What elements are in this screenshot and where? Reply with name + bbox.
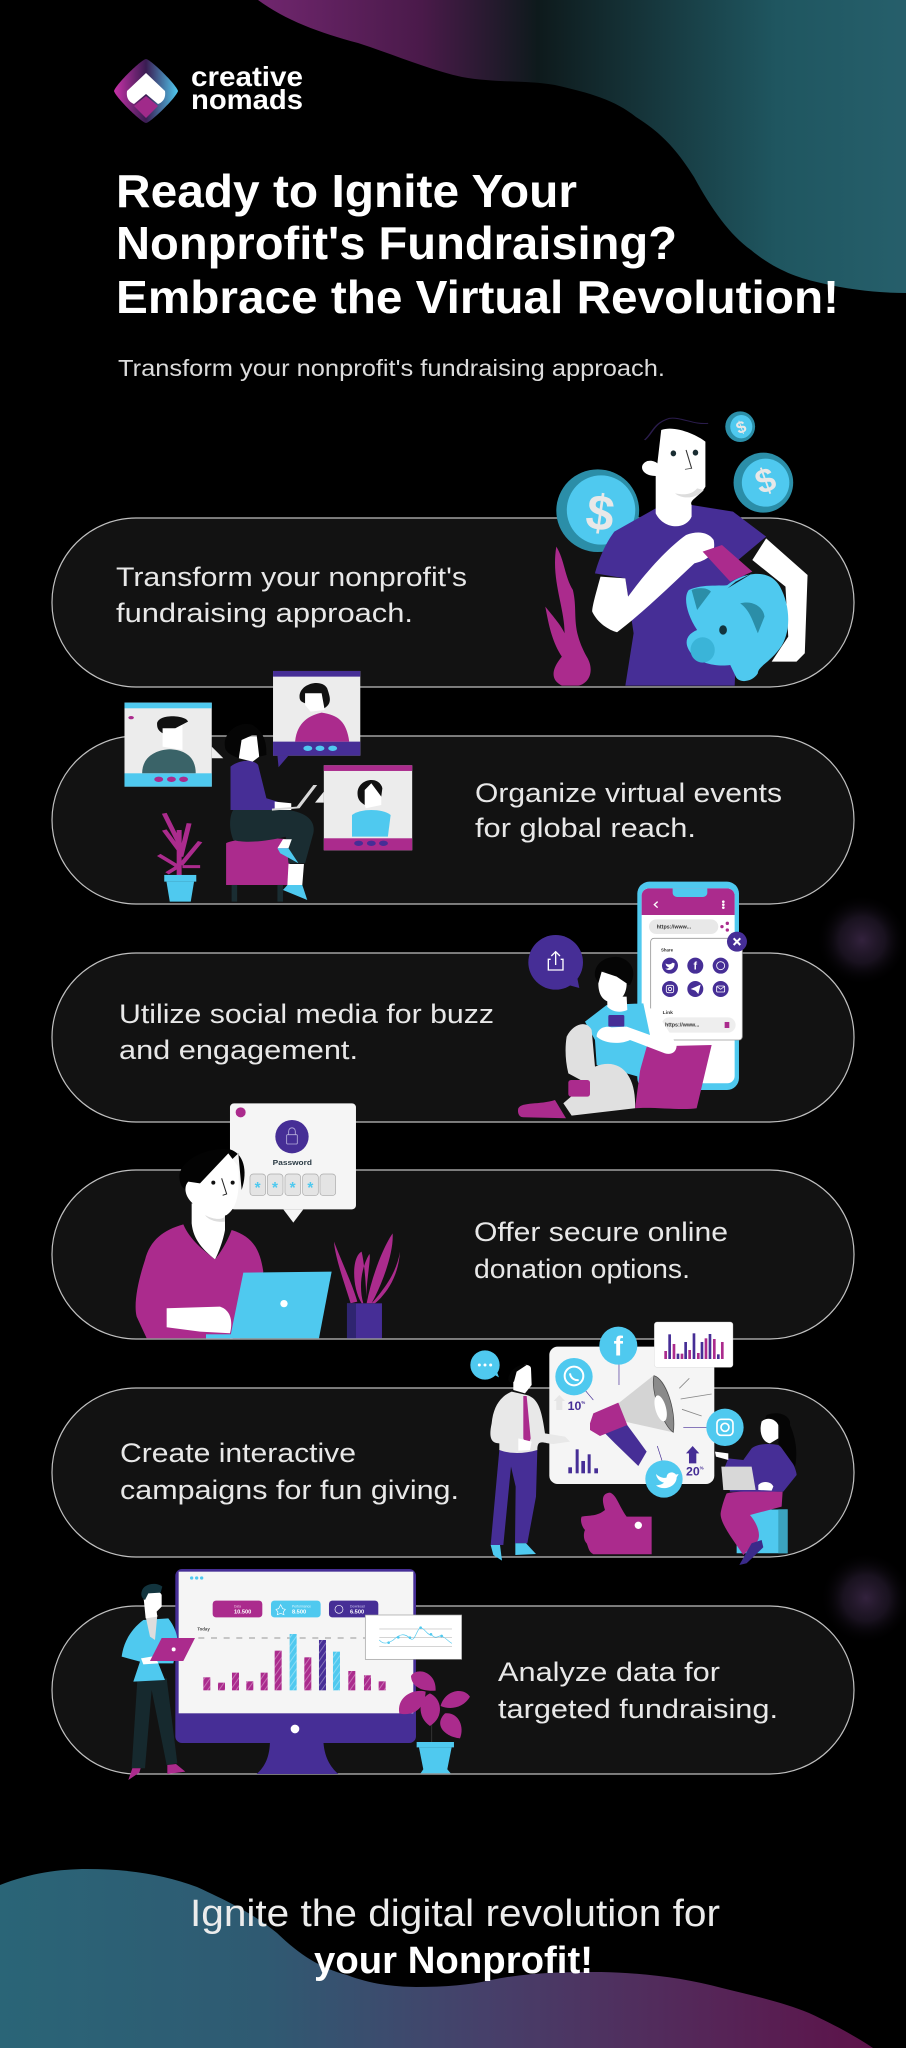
title: Ready to Ignite Your [116,165,577,217]
line chart card [365,1615,462,1659]
bar chart: Today [197,1626,210,1631]
password bubble: Password [273,1158,312,1167]
share popup: https://www... [665,1023,700,1029]
stat 20 percent [686,1446,704,1479]
plant in pot [399,1671,470,1773]
stat card: performance: Performance [292,1604,311,1608]
share popup: Share [661,947,674,952]
panel text: for global reach. [475,813,696,843]
panel: campaigns [52,1388,854,1557]
stat card: data: Data [234,1604,241,1608]
panel text [119,999,494,1065]
stat 10 percent [554,1395,585,1413]
right arm [752,538,808,662]
monitor [175,1569,416,1774]
illustration: password and laptop [136,1103,400,1338]
window 2 [273,671,360,767]
panel text: campaigns for fun giving. [120,1475,459,1505]
panel text [498,1657,778,1724]
panel text: Organize virtual events [475,778,782,808]
stat card: download [329,1601,378,1617]
title: Nonprofit's Fundraising? [116,217,677,269]
logo mark [114,59,178,123]
board [549,1347,714,1484]
panel text [475,778,782,843]
coin symbols: $ [733,417,749,438]
seated woman [225,724,317,900]
logo [114,59,303,123]
man with laptop [122,1584,195,1780]
close button [727,932,747,952]
panel: social media [52,953,854,1122]
facebook icon: f [614,1330,624,1361]
stat card: data [213,1601,262,1617]
background wave: bottom [0,1869,873,2048]
glow orb lower [820,1552,906,1644]
head [642,429,705,526]
megaphone [590,1376,712,1466]
glow orb upper [816,894,906,986]
panel text: Analyze data for [498,1657,720,1687]
closing statement: Ignite the digital revolution for [190,1893,720,1935]
instagram icon [706,1409,744,1446]
title: Embrace the Virtual Revolution! [116,271,839,323]
big coin [556,469,639,552]
seated person [518,957,712,1118]
closing statement: your Nonprofit! [314,1940,593,1982]
laptop [206,1272,332,1338]
plant [545,547,591,686]
illustration: man with piggy bank [545,411,808,686]
window 1 [124,703,223,787]
share popup [651,938,742,1040]
illustration: woman in video calls [124,671,412,902]
logo wordmark [191,61,303,115]
stool [226,838,290,902]
plant in pot [159,813,200,902]
window 3 [315,765,412,850]
whatsapp icon [555,1358,593,1395]
illustration: analytics dashboard [122,1569,470,1780]
share bubble [528,935,583,990]
panel text: fundraising approach. [116,598,413,628]
password bubble: * [290,1180,296,1197]
left arm [592,532,714,632]
facebook icon [599,1327,637,1365]
mini bars [568,1449,598,1473]
presenter man [490,1365,570,1561]
title [116,165,839,323]
stat card: data: 10.500 [234,1609,251,1615]
bar chart [197,1626,386,1690]
bar chart card [654,1322,733,1367]
stat 10 percent: 10 [568,1399,581,1413]
stat card: performance [271,1601,321,1617]
subtitle: Transform your nonprofit's fundraising approach. [118,355,665,381]
share popup: Link [663,1010,673,1016]
stat 10 percent: % [581,1400,585,1405]
panel text: and engagement. [119,1035,358,1065]
stat 20 percent: 20 [686,1465,700,1479]
panel text: Utilize social media for buzz [119,999,494,1029]
phone [637,882,739,1090]
panel: analytics [52,1606,854,1774]
password bubble: * [255,1180,261,1197]
logo wordmark: nomads [191,84,303,115]
share popup: f [694,961,698,973]
password bubble [230,1103,356,1223]
stat card: download: Download [350,1604,365,1608]
password bubble: * [272,1180,278,1197]
shirt [595,505,766,686]
connector lines [583,1362,707,1463]
coin symbols: $ [750,460,781,502]
logo wordmark: creative [191,61,303,92]
piggy [686,574,788,681]
twitter icon [645,1460,683,1498]
panel text [474,1217,728,1284]
woman at laptop [136,1149,263,1338]
panel text: Offer secure online [474,1217,728,1247]
bill [703,545,752,582]
stat 20 percent: % [700,1466,704,1471]
panel: events [52,736,854,904]
panel text [120,1438,459,1505]
panel text [116,562,467,628]
password bubble: * [307,1180,313,1197]
coin symbols: $ [583,483,618,543]
panel text: donation options. [474,1254,690,1284]
illustration: marketing campaign [470,1322,797,1565]
coin symbols [583,417,781,543]
panel text: Create interactive [120,1438,356,1468]
panel: transform [52,518,854,687]
stat card: performance: 8.500 [292,1609,306,1615]
panel: donations [52,1170,854,1339]
panel text: Transform your nonprofit's [116,562,467,592]
speech bubble [470,1350,500,1380]
thumbs up [581,1493,652,1554]
closing statement [190,1893,720,1982]
phone: https://www... [657,925,692,931]
panel text: targeted fundraising. [498,1694,778,1724]
plant in pot [334,1233,400,1338]
stat card: download: 6.500 [350,1609,364,1615]
illustration: person with phone sharing [518,882,747,1118]
seated woman [715,1413,797,1565]
background wave: top right [258,0,906,293]
